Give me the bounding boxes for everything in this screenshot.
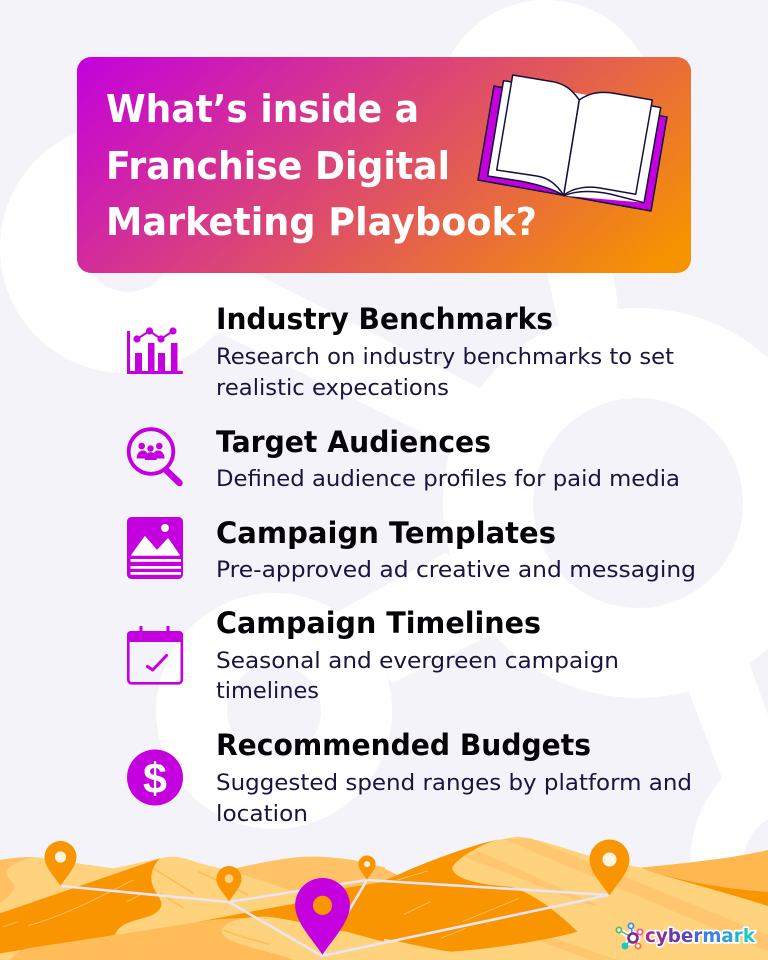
description: Defined audience profiles for paid media bbox=[216, 467, 680, 492]
description: Suggested spend ranges by platform and bbox=[216, 771, 692, 796]
title: Marketing Playbook? bbox=[106, 200, 537, 244]
description bbox=[216, 649, 619, 704]
description: timelines bbox=[216, 679, 319, 704]
icon: bar chart bbox=[127, 327, 183, 374]
description bbox=[216, 345, 674, 401]
heading: Industry Benchmarks bbox=[216, 302, 553, 336]
desert dunes landscape bbox=[0, 837, 768, 960]
logo: cybermark bbox=[616, 923, 755, 949]
item: campaign templates bbox=[127, 516, 696, 583]
description: Research on industry benchmarks to set bbox=[216, 345, 674, 370]
title: What’s inside a bbox=[106, 87, 419, 131]
title panel bbox=[77, 57, 691, 273]
connecting route lines bbox=[61, 880, 609, 956]
logo mark bbox=[616, 923, 643, 949]
map pin: far left bbox=[44, 841, 76, 886]
item: target audiences bbox=[129, 425, 680, 492]
icon: dollar coin bbox=[127, 750, 183, 806]
item: industry benchmarks bbox=[127, 302, 674, 401]
heading: Campaign Timelines bbox=[216, 606, 541, 640]
description: Seasonal and evergreen campaign bbox=[216, 649, 619, 674]
icon: dollar coin: $ bbox=[143, 755, 167, 803]
description: realistic expecations bbox=[216, 376, 449, 401]
map pin: purple main bbox=[295, 878, 350, 955]
description bbox=[216, 771, 692, 827]
map pin: left bbox=[216, 866, 242, 901]
item: recommended budgets bbox=[127, 728, 692, 827]
map pin: small center bbox=[358, 856, 376, 880]
title: Franchise Digital bbox=[106, 144, 450, 188]
icon: open book bbox=[478, 75, 667, 211]
heading: Target Audiences bbox=[216, 425, 491, 459]
heading: Campaign Templates bbox=[216, 516, 556, 550]
map pin: right bbox=[590, 840, 630, 896]
logo wordmark: cybermark bbox=[645, 925, 755, 947]
description: location bbox=[216, 802, 308, 827]
icon: calendar bbox=[127, 626, 183, 683]
title bbox=[106, 87, 537, 244]
heading: Recommended Budgets bbox=[216, 728, 591, 762]
icon: image template bbox=[127, 517, 183, 579]
description: Pre-approved ad creative and messaging bbox=[216, 558, 696, 583]
icon: magnifier with people bbox=[129, 429, 180, 483]
item: campaign timelines bbox=[127, 606, 619, 704]
